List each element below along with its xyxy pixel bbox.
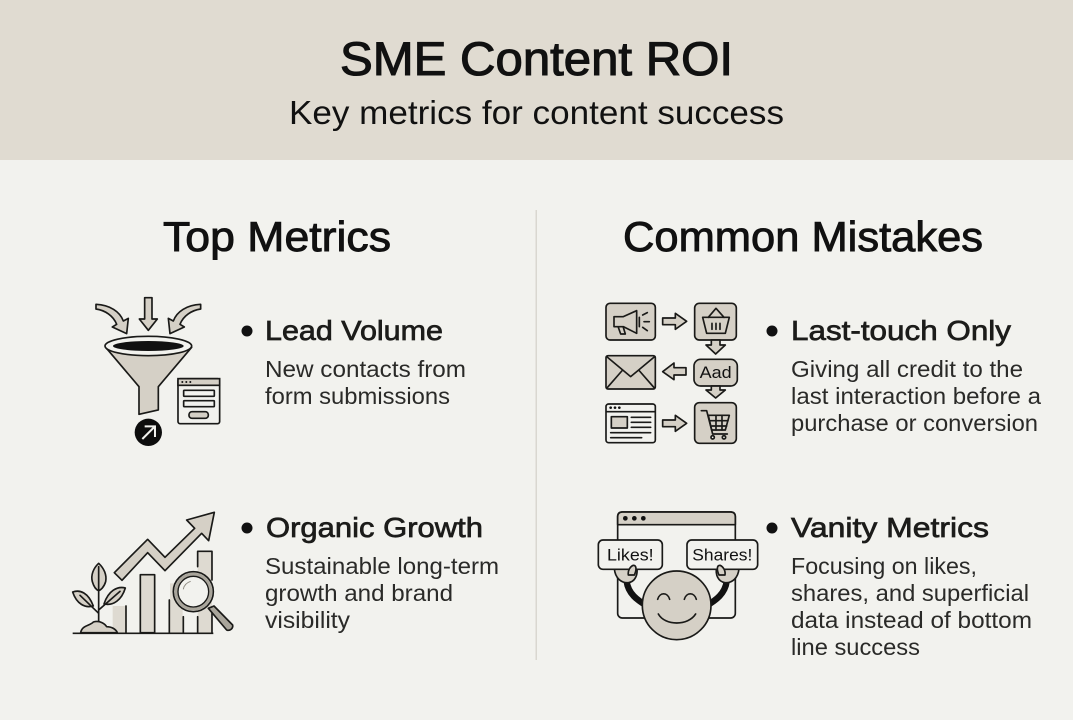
text: vanity metrics: data instead of bottom xyxy=(791,607,1032,633)
bullet: vanity metrics xyxy=(766,522,778,534)
heading: common mistakes: Common Mistakes xyxy=(623,213,983,260)
text: organic growth: visibility xyxy=(265,607,351,633)
text: vanity metrics: shares, and superficial xyxy=(791,580,1029,606)
icon: funnel with form xyxy=(96,298,220,446)
text: organic growth: Organic Growth xyxy=(266,512,483,543)
sign text: likes: Likes! xyxy=(607,547,654,565)
panel: top metrics xyxy=(73,213,499,633)
text: last-touch only xyxy=(791,315,1041,436)
bullet: lead volume xyxy=(242,326,252,336)
panel: header xyxy=(0,0,1073,160)
text: organic growth xyxy=(265,512,499,633)
icon: attribution flow xyxy=(606,303,737,443)
text: last-touch only: last interaction before a xyxy=(791,383,1041,409)
text: last-touch only: Last-touch Only xyxy=(791,315,1011,346)
title: SME Content ROI xyxy=(340,32,733,85)
text: organic growth: Sustainable long-term xyxy=(265,553,499,579)
icon: growth chart with plant and magnifier xyxy=(73,512,233,633)
text: last-touch only: purchase or conversion xyxy=(791,410,1038,436)
text: lead volume: form submissions xyxy=(265,383,450,409)
text: vanity metrics: Vanity Metrics xyxy=(791,512,989,543)
text: vanity metrics xyxy=(791,512,1032,660)
heading: top metrics: Top Metrics xyxy=(163,213,391,260)
text: vanity metrics: Focusing on likes, xyxy=(791,553,977,579)
icon text: Aad: Aad xyxy=(700,363,732,382)
text: organic growth: growth and brand xyxy=(265,580,453,606)
subtitle: Key metrics for content success xyxy=(289,94,784,131)
text: last-touch only: Giving all credit to the xyxy=(791,356,1023,382)
sign text: shares: Shares! xyxy=(692,547,752,565)
text: lead volume xyxy=(265,315,466,409)
bullet: last-touch only xyxy=(766,326,778,336)
bullet: organic growth xyxy=(242,522,252,534)
text: vanity metrics: line success xyxy=(791,634,920,660)
text: lead volume: Lead Volume xyxy=(265,315,443,346)
text: lead volume: New contacts from xyxy=(265,356,466,382)
panel: common mistakes xyxy=(598,213,1041,660)
icon: smiley holding likes and shares signs xyxy=(598,512,758,640)
